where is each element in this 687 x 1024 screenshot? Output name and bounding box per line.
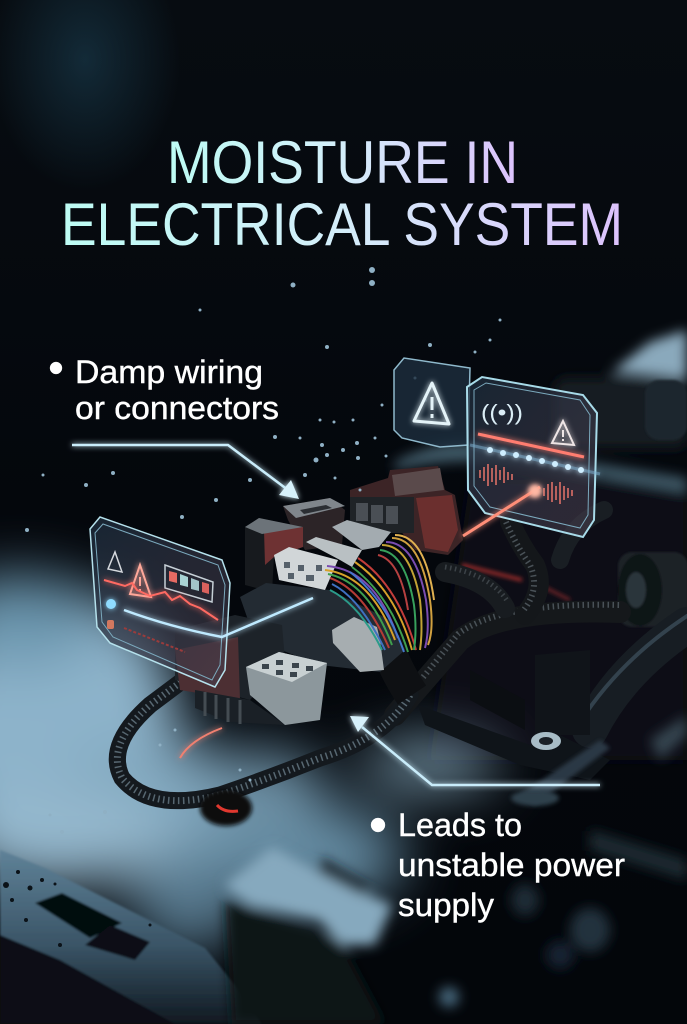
gray connectors	[274, 520, 391, 590]
red waveforms	[480, 464, 572, 504]
red pulse line	[104, 580, 218, 620]
cables	[117, 510, 687, 801]
arrow: to connectors	[72, 445, 299, 499]
icon: small warning	[108, 552, 122, 572]
center blurred block	[224, 847, 392, 1024]
title	[61, 129, 623, 258]
right blurred shapes	[439, 715, 687, 1007]
callout: damp wiring	[50, 354, 279, 426]
colored wires	[325, 535, 434, 652]
left slab	[0, 850, 262, 1024]
slab water droplets	[3, 870, 152, 947]
red beam from right panel	[463, 485, 541, 536]
connector block	[175, 466, 463, 725]
blue energy line	[106, 598, 313, 637]
small red spark under connector	[180, 728, 222, 758]
top red block	[350, 466, 463, 555]
cylinder right	[618, 380, 687, 627]
right cable	[445, 510, 687, 730]
background glow top left	[0, 0, 180, 190]
red connector at cable knot	[200, 790, 252, 826]
foreground blurred slabs	[0, 715, 687, 1024]
icon: warning triangle	[552, 421, 574, 445]
droplets on dark background	[25, 267, 502, 834]
smoke cloud	[0, 575, 500, 950]
blurred machinery right	[395, 330, 687, 760]
mid dark connector	[245, 498, 345, 592]
thin wet cable loop	[117, 675, 410, 801]
holo panel: right signal	[467, 377, 600, 537]
large braided cable	[395, 605, 620, 715]
red signal line	[478, 434, 584, 457]
title line 2: ELECTRICAL SYSTEM	[61, 191, 623, 258]
icon: signal waves: ((•))	[481, 400, 523, 425]
lower machinery right	[418, 650, 610, 806]
callout: unstable power: supply	[398, 887, 494, 923]
callout: unstable power: Leads to	[398, 807, 522, 843]
lower dark body	[175, 583, 405, 725]
glowing red tracks	[462, 565, 570, 600]
small red status	[107, 620, 114, 629]
icon: red warning	[130, 565, 151, 597]
callout: damp wiring: Damp wiring	[75, 354, 263, 390]
arrow: to cable	[350, 716, 600, 785]
icon: warning triangle	[414, 383, 449, 424]
title line 1: MOISTURE IN	[167, 129, 518, 196]
holo panel: left status	[90, 517, 313, 687]
blue dotted line	[470, 445, 600, 474]
callout: unstable power: unstable power	[398, 847, 625, 883]
callout: unstable power	[371, 807, 625, 923]
callout: damp wiring: or connectors	[75, 390, 279, 426]
holo panel: back warning	[394, 358, 470, 447]
status lights	[165, 565, 213, 602]
cable sleeve	[385, 640, 412, 695]
